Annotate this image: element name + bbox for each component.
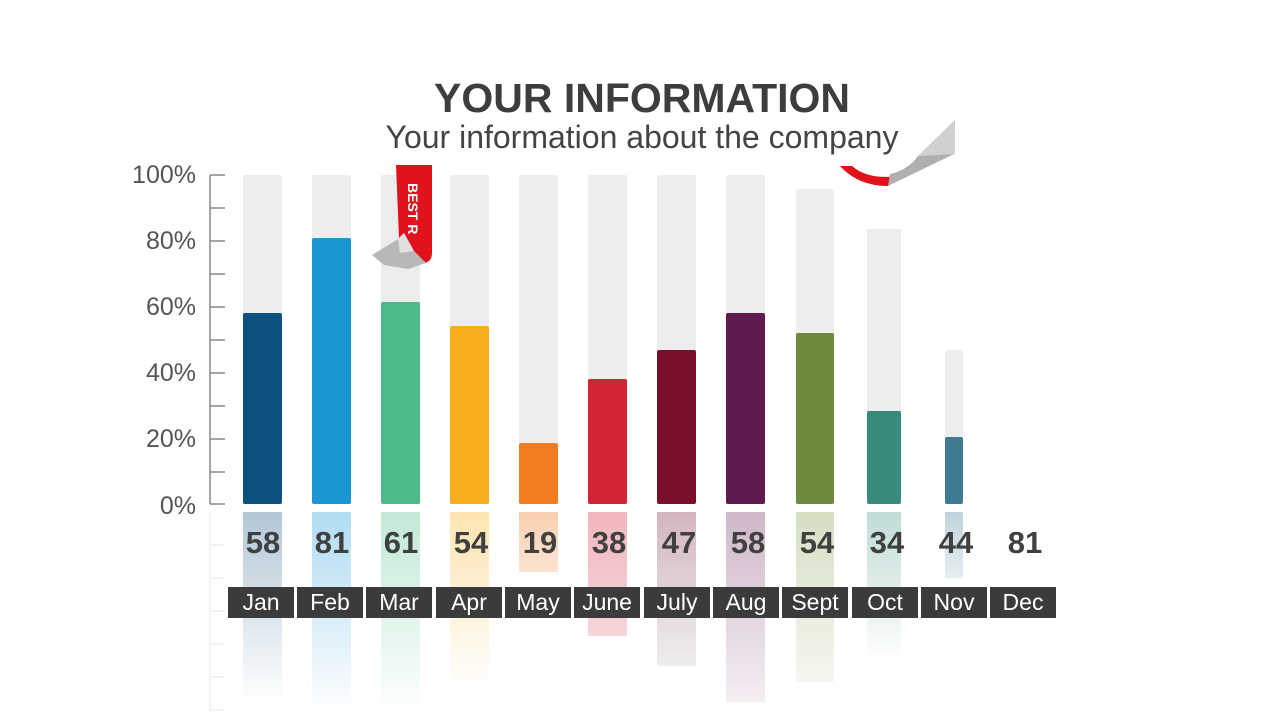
value labels: 81 xyxy=(1008,525,1042,560)
value labels: 44 xyxy=(939,525,973,560)
value labels: 38 xyxy=(592,525,626,560)
y axis: 80% xyxy=(146,227,196,255)
value labels: 61 xyxy=(384,525,418,560)
ribbon: best: BEST R xyxy=(405,183,421,234)
value labels: 54 xyxy=(454,525,488,560)
value labels: 34 xyxy=(870,525,904,560)
month labels: May xyxy=(516,589,560,615)
month labels: Sept xyxy=(791,589,839,615)
value labels: 47 xyxy=(662,525,696,560)
month labels: June xyxy=(582,589,632,615)
month labels: Aug xyxy=(726,589,766,615)
value labels: 58 xyxy=(246,525,280,560)
title: YOUR INFORMATION xyxy=(434,75,850,121)
y axis: 100% xyxy=(132,161,196,189)
value labels: 19 xyxy=(523,525,557,560)
value labels xyxy=(246,525,1042,560)
value labels: 81 xyxy=(315,525,349,560)
month labels: Dec xyxy=(1003,589,1043,615)
y axis xyxy=(132,161,225,710)
bar chart xyxy=(243,175,963,702)
month labels: Jan xyxy=(242,589,280,615)
value labels: 54 xyxy=(800,525,834,560)
y axis: 20% xyxy=(146,425,196,453)
value labels: 58 xyxy=(731,525,765,560)
y axis: 60% xyxy=(146,293,196,321)
month labels: Apr xyxy=(451,589,487,615)
month labels: July xyxy=(657,589,697,615)
y axis: 40% xyxy=(146,359,196,387)
ribbon: corner xyxy=(840,120,955,186)
month labels xyxy=(228,587,1056,618)
ribbon: best xyxy=(372,165,432,269)
subtitle: Your information about the company xyxy=(386,119,898,155)
y axis: 0% xyxy=(160,492,196,520)
month labels: Nov xyxy=(934,589,974,615)
month labels: Feb xyxy=(310,589,350,615)
month labels: Mar xyxy=(379,589,419,615)
month labels: Oct xyxy=(867,589,903,615)
